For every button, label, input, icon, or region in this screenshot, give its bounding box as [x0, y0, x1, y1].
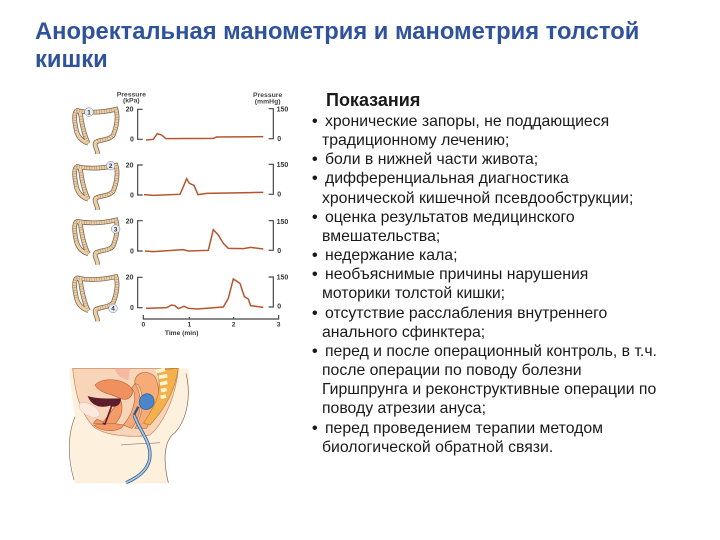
icon: colon position 3: 3 [114, 226, 118, 233]
body outline [69, 368, 190, 483]
axis labels 3: 0 [130, 248, 134, 255]
time axis: Time (min) [165, 330, 198, 337]
text block: indications list: • [312, 247, 318, 264]
text block: indications list: отсутствие расслабления внутреннего [325, 305, 607, 322]
text block: indications list: • [312, 343, 318, 360]
text block: indications list: перед проведением терапии методом [325, 420, 603, 437]
axis labels 2 [126, 162, 288, 199]
icon: colon position 1: 1 [87, 109, 91, 116]
axis labels 1: 20 [126, 107, 134, 114]
text block: indications list: • [312, 170, 318, 187]
axes 2 [138, 164, 273, 195]
axis labels 3: 0 [277, 248, 281, 255]
axis labels 3: 20 [126, 218, 134, 225]
icon: colon position 4: 4 [111, 306, 115, 313]
heading: indications: Показания [326, 90, 420, 110]
pelvic organs [73, 368, 178, 436]
axis labels 3 [126, 218, 288, 255]
text block: indications list: хронические запоры, не поддающиеся [325, 113, 609, 130]
icon: colon position 1 [75, 108, 117, 154]
text block: indications list: перед и после операционный контроль, в т.ч. [325, 343, 657, 360]
icon: colon position 2: 2 [109, 163, 113, 170]
list item 2 [312, 151, 538, 168]
text block: indications list: традиционному лечению; [322, 132, 509, 149]
axes 3 [138, 221, 273, 251]
axis labels 2: 20 [126, 162, 134, 169]
list item 4 [312, 209, 575, 245]
axis labels 1: 150 [277, 106, 288, 113]
time axis: 1 [187, 322, 191, 329]
pressure trace 2 [144, 179, 263, 195]
list item 3 [312, 170, 633, 207]
panel: colon and pressure trace 3 [75, 218, 288, 265]
skin crease [121, 443, 160, 445]
time axis: 0 [141, 322, 145, 329]
axis headers: (mmHg) [255, 98, 281, 105]
axis labels 1: 0 [130, 137, 134, 144]
panel: colon and pressure trace 2 [75, 161, 288, 210]
list item 5 [312, 247, 457, 264]
axis labels 1: 0 [277, 136, 281, 143]
text block: indications list: биологической обратной связи. [322, 439, 553, 456]
catheter [126, 415, 150, 483]
axis headers: Pressure [117, 91, 146, 98]
text block: indications list: • [312, 113, 318, 130]
axis labels 3: 150 [277, 219, 288, 226]
list item 7 [312, 305, 607, 341]
icon: colon position 4 [75, 277, 117, 321]
text block: indications list: • [312, 420, 318, 437]
text block: indications list: • [312, 305, 318, 322]
text block: indications list: • [312, 209, 318, 226]
spine [143, 368, 178, 425]
axis labels 1 [126, 106, 288, 144]
text block: indications list: • [312, 151, 318, 168]
axes 1 [138, 109, 273, 139]
time axis [141, 315, 281, 337]
title: кишки [35, 46, 108, 73]
time axis: 3 [277, 322, 281, 329]
axis labels 4: 0 [130, 305, 134, 312]
panel: colon and pressure trace 4 [75, 275, 288, 337]
list item 9 [312, 420, 603, 456]
title [35, 18, 639, 73]
icon: colon position 2 [75, 161, 117, 210]
text block: indications list: • [312, 266, 318, 283]
text block: indications list: дифференциальная диагностика [325, 170, 569, 187]
pressure trace 3 [145, 230, 263, 252]
axis labels 4: 150 [277, 275, 288, 282]
axis labels 4 [126, 275, 288, 312]
list item 1 [312, 113, 609, 149]
text block: indications list: недержание кала; [325, 247, 457, 264]
icon: colon position 3 [75, 220, 120, 265]
anatomy illustration with balloon catheter [69, 368, 190, 483]
list item 6 [312, 266, 588, 302]
axis labels 2: 150 [277, 162, 288, 169]
axis labels 2: 0 [130, 192, 134, 199]
text block: indications list: оценка результатов медицинского [325, 209, 575, 226]
title: Аноректальная манометрия и манометрия толстой [35, 18, 639, 45]
axis labels 4: 20 [126, 275, 134, 282]
text block: indications list: моторики толстой кишки; [322, 285, 505, 302]
axis headers: (kPa) [123, 98, 140, 105]
axes 4 [138, 277, 273, 308]
text block: indications list: поводу атрезии ануса; [322, 400, 486, 417]
time axis: 2 [232, 322, 236, 329]
axis labels 2: 0 [277, 191, 281, 198]
list item 8 [312, 343, 657, 417]
text block: indications list: хронической кишечной псевдообструкции; [322, 190, 633, 207]
text block: indications list: Гиршпрунга и реконструктивные операции по [322, 381, 656, 398]
text block: indications list: боли в нижней части живота; [325, 151, 538, 168]
pressure trace 1 [146, 134, 263, 140]
text block: indications list: необъяснимые причины нарушения [325, 266, 588, 283]
axis labels 4: 0 [277, 304, 281, 311]
pubic bone [77, 399, 102, 421]
balloon [137, 391, 157, 412]
axis headers [117, 91, 282, 105]
panel: colon and pressure trace 1 [75, 91, 288, 154]
text block: indications list: после операции по поводу болезни [322, 362, 582, 379]
text block: indications list: анального сфинктера; [322, 324, 485, 341]
pressure trace 4 [146, 279, 263, 309]
bladder, dark [88, 396, 121, 407]
axis headers: Pressure [253, 92, 282, 99]
text block: indications list: вмешательства; [322, 228, 440, 245]
